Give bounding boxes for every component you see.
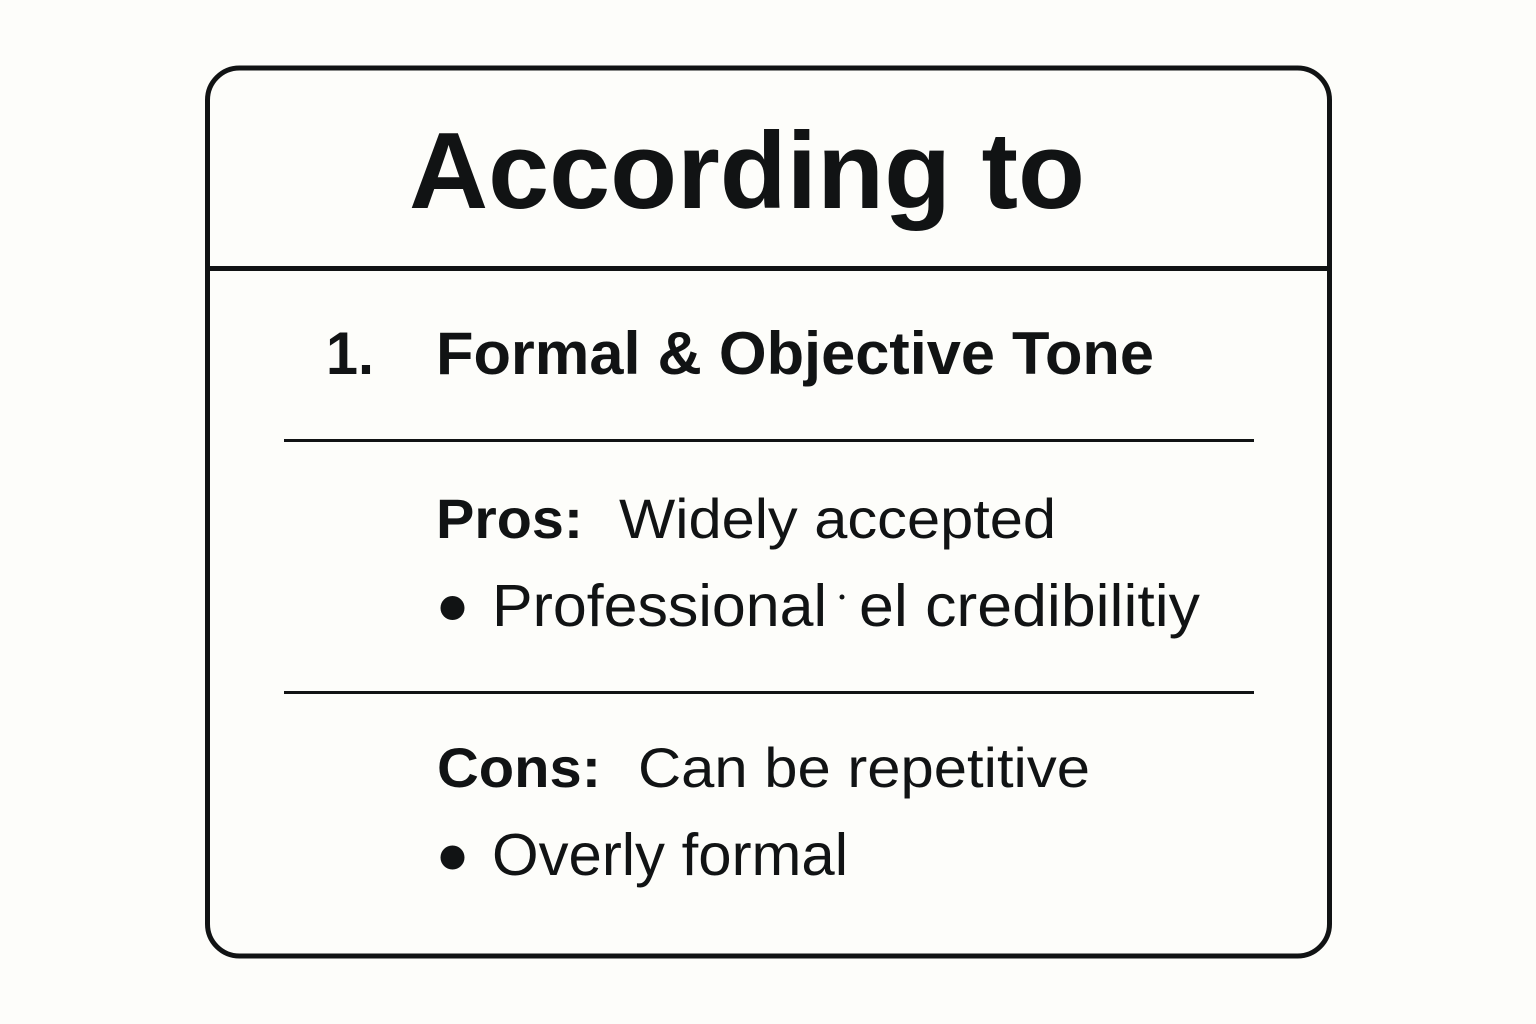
pros label: Pros: xyxy=(436,487,583,550)
pros text: Widely accepted xyxy=(619,487,1056,550)
heading: formal and objective tone: Formal & Objective Tone xyxy=(436,320,1154,387)
pros bullet xyxy=(440,596,464,620)
pros bullet text continued: el credibilitiy xyxy=(859,573,1201,639)
cons text: Can be repetitive xyxy=(638,736,1090,799)
list number: 1. xyxy=(326,320,374,387)
stray dot xyxy=(840,594,844,600)
title: According to xyxy=(409,110,1085,232)
cons bullet xyxy=(440,846,464,870)
cons bullet text: Overly formal xyxy=(492,822,848,888)
cons label: Cons: xyxy=(437,736,601,799)
pros bullet text: Professional xyxy=(492,573,827,639)
panel: card xyxy=(208,68,1330,956)
